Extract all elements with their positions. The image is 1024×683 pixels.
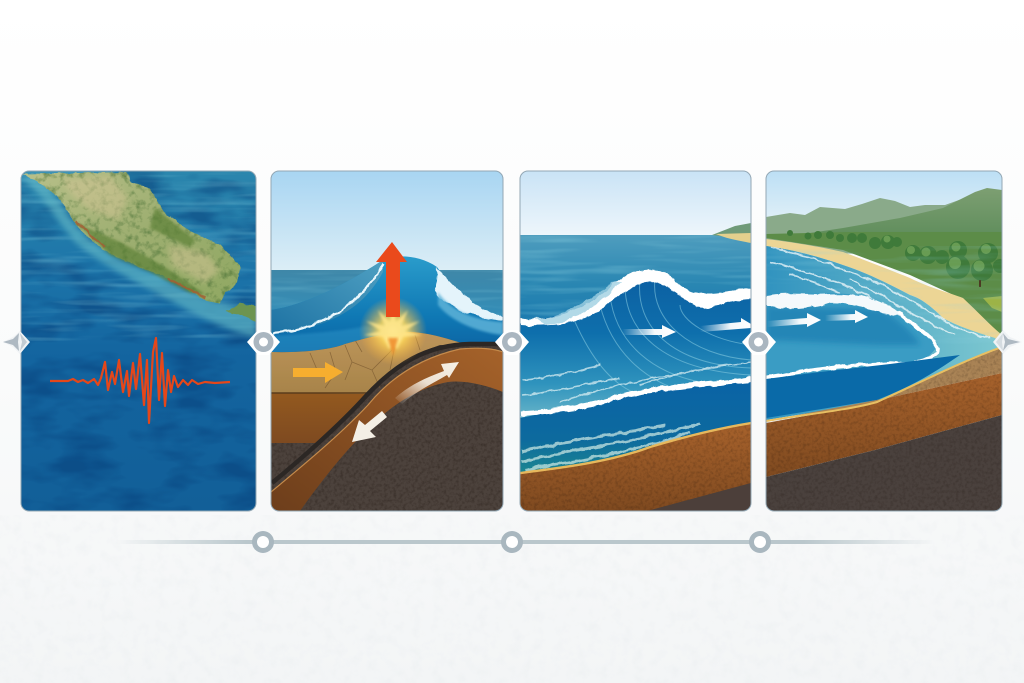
dark basement corner [647, 483, 751, 511]
deep-water trough [520, 381, 751, 478]
wave face [520, 275, 751, 420]
deep trough near front [766, 355, 960, 418]
inundating wave core [766, 293, 938, 378]
far mountains [766, 198, 960, 254]
timeline node 2 [501, 531, 523, 553]
tan top layer [766, 347, 1002, 421]
foam edge of the surge [766, 312, 938, 378]
explosion glow at epicentre [359, 297, 427, 365]
near hills [790, 188, 1002, 290]
panel 2: fault slip lifts the water column [271, 171, 503, 511]
arrow: red, upward [376, 242, 407, 317]
terrain: lighter highlands [62, 176, 220, 283]
terrain: green lowlands [78, 208, 205, 294]
island [226, 303, 256, 322]
arrow: cream, down the plate [352, 411, 387, 442]
wave crest foam [520, 270, 751, 326]
wave left slope [271, 260, 383, 334]
foam line [520, 380, 751, 414]
coastal shallows [21, 176, 256, 338]
connector: star right [993, 330, 1022, 354]
arrow: orange, pushing right [293, 362, 343, 383]
subducting plate [271, 348, 503, 511]
curl lines on wave face [575, 279, 751, 395]
tree clusters [787, 230, 1007, 287]
dark basement [766, 415, 1002, 511]
grass strip [766, 232, 1002, 345]
rust fault trace [76, 222, 205, 298]
soil cross-section [520, 420, 751, 511]
landmass [22, 172, 240, 303]
panel 3: wave crossing open sea [520, 171, 751, 511]
tree trunk [979, 280, 981, 287]
tree highlights [884, 236, 991, 272]
surf lines on the shore [770, 248, 990, 338]
uplifted wave body [271, 256, 503, 358]
arrow: white, first [622, 325, 676, 338]
white streaks low on the face [522, 362, 751, 402]
rock layer: cracked tan crust [271, 332, 470, 394]
sand beach [766, 239, 1002, 345]
wave lip foam [272, 264, 383, 333]
timeline node 3 [749, 531, 771, 553]
connector: node 2 [495, 330, 529, 355]
arrow: white, first [767, 313, 821, 327]
shallow water [766, 246, 1002, 420]
connector: node 1 [247, 330, 280, 355]
rock layer: grey basement [271, 330, 503, 511]
arrow: white, second [825, 310, 868, 323]
crest foam [766, 294, 905, 316]
connector: star left [3, 331, 30, 354]
rock layer: brown left [271, 393, 368, 443]
brown soil layer [766, 373, 1002, 477]
timeline rail [115, 531, 935, 553]
arrow: white, second [700, 318, 751, 332]
panel 1: earthquake offshore, seen from above [21, 171, 256, 511]
connector: node 3 [742, 330, 776, 355]
shoreline foam [522, 424, 700, 470]
timeline node 1 [252, 531, 274, 553]
soil texture and shoreline [766, 345, 1002, 511]
distant headland [712, 223, 750, 236]
wave curl, lit blue [435, 266, 503, 321]
panel 4: wave reaches the coast [766, 171, 1007, 511]
seismic wave trace [50, 338, 230, 423]
arrow: curved cream, up the plate [395, 362, 459, 404]
crust texture [271, 332, 470, 394]
sea spray band at the base [272, 326, 372, 352]
meadow patch [983, 296, 1002, 312]
fault gap [272, 344, 503, 483]
panel frames [21, 171, 1002, 511]
